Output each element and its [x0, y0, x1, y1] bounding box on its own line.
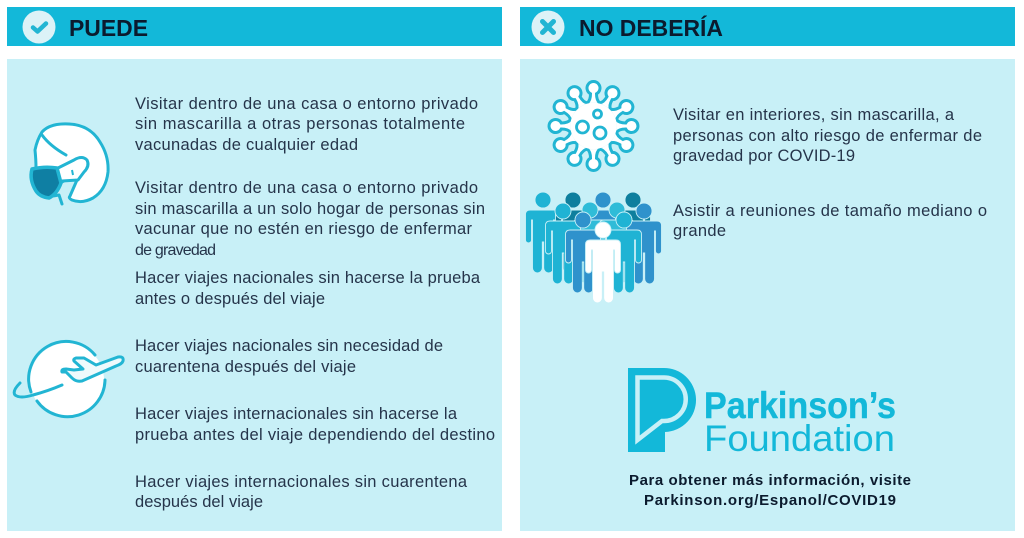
- header: no debería: [520, 7, 1015, 46]
- text block: asistir a reuniones: Asistir a reuniones de tamaño mediano o: [673, 202, 987, 220]
- logo: parkinson's foundation: [628, 368, 896, 459]
- text block: asistir a reuniones: [673, 202, 987, 240]
- text block: visitar sin mascarilla, vacunadas: Visitar dentro de una casa o entorno privado: [135, 95, 478, 113]
- text block: visitar un solo hogar: [135, 179, 485, 259]
- panel: no debería: [520, 59, 1015, 531]
- icon: airplane and globe: [14, 341, 123, 417]
- text block: viajes internacionales sin prueba: [135, 405, 495, 444]
- text block: visitar sin mascarilla, vacunadas: [135, 95, 478, 154]
- text block: viajes internacionales sin prueba: Hacer viajes internacionales sin hacerse la: [135, 405, 458, 423]
- text block: visitar en interiores: gravedad por COVID-19: [673, 147, 855, 165]
- logo wordmark: Parkinson’s: [704, 385, 896, 426]
- text block: visitar en interiores: Visitar en interiores, sin mascarilla, a: [673, 106, 955, 124]
- text block: asistir a reuniones: grande: [673, 222, 726, 240]
- text block: viajes internacionales sin cuarentena: Hacer viajes internacionales sin cuarentena: [135, 473, 468, 491]
- text block: visitar sin mascarilla, vacunadas: vacunadas de cualquier edad: [135, 136, 358, 154]
- text block: viajes nacionales sin prueba: antes o después del viaje: [135, 290, 325, 308]
- heading: no debería: NO DEBERÍA: [579, 14, 723, 41]
- text block: viajes nacionales sin cuarentena: cuarentena después del viaje: [135, 358, 356, 376]
- logo mark: [628, 368, 696, 452]
- text block: viajes nacionales sin cuarentena: Hacer viajes nacionales sin necesidad de: [135, 337, 443, 355]
- text block: visitar un solo hogar: sin mascarilla a un solo hogar de personas sin: [135, 200, 485, 218]
- text block: viajes nacionales sin cuarentena: [135, 337, 443, 376]
- logo wordmark: Foundation: [704, 418, 895, 459]
- heading: puede: PUEDE: [69, 15, 148, 41]
- call to action: Para obtener más información, visite: [629, 472, 911, 489]
- text block: viajes internacionales sin prueba: prueba antes del viaje dependiendo del destino: [135, 426, 495, 444]
- call to action: Parkinson.org/Espanol/COVID19: [644, 492, 896, 509]
- header: puede: [7, 7, 502, 46]
- text block: viajes nacionales sin prueba: [135, 269, 481, 308]
- text block: viajes internacionales sin cuarentena: después del viaje: [135, 493, 263, 511]
- icon: virus: [549, 82, 638, 170]
- icon: check mark: [22, 10, 56, 44]
- text block: viajes nacionales sin prueba: Hacer viajes nacionales sin hacerse la prueba: [135, 269, 481, 287]
- text block: visitar sin mascarilla, vacunadas: sin mascarilla a otras personas totalmente: [135, 115, 465, 133]
- text block: viajes internacionales sin cuarentena: [135, 473, 468, 511]
- text block: visitar en interiores: [673, 106, 982, 165]
- panel: puede: [7, 59, 502, 531]
- logo wordmark: [704, 385, 896, 459]
- text block: visitar un solo hogar: vacunar que no estén en riesgo de enfermar: [135, 220, 472, 238]
- icon: face with mask: [31, 124, 108, 204]
- call to action: [629, 472, 911, 509]
- icon: cross: [532, 10, 564, 44]
- text block: visitar un solo hogar: de gravedad: [135, 242, 216, 259]
- text block: visitar un solo hogar: Visitar dentro de una casa o entorno privado: [135, 179, 478, 197]
- text block: visitar en interiores: personas con alto riesgo de enfermar de: [673, 127, 982, 145]
- icon: crowd of people: [526, 192, 662, 303]
